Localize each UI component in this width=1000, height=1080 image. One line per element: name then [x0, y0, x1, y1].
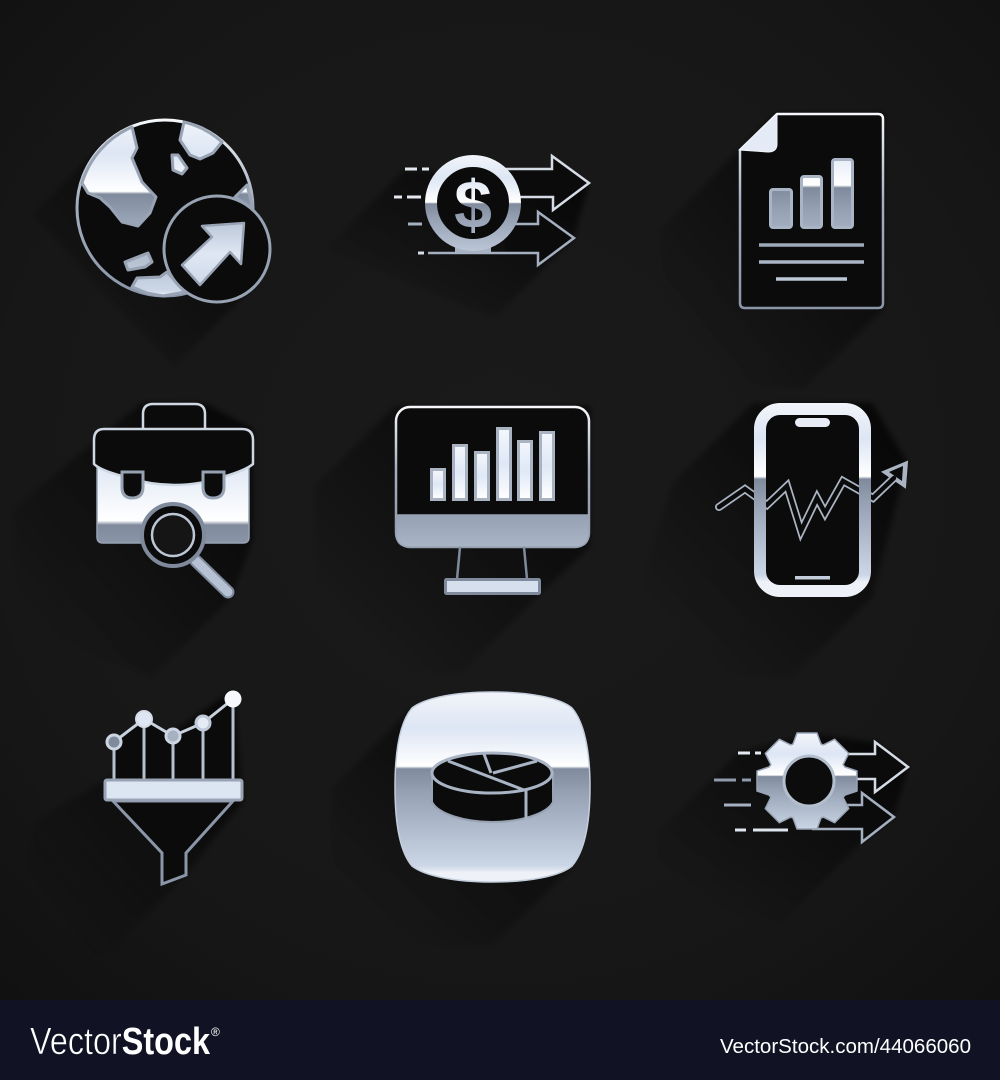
icon: globe with arrow: [32, 120, 270, 366]
handle: [143, 404, 205, 430]
case flap: [94, 429, 253, 485]
logo: VectorStock: [30, 1021, 211, 1063]
icon: squircle with pie chart: [332, 692, 590, 946]
stock line: [719, 462, 907, 531]
arrows: [428, 156, 589, 265]
phone frame: [760, 409, 865, 591]
funnel rim: [105, 780, 242, 800]
folded corner: [739, 114, 777, 152]
arrow badge: [164, 196, 270, 302]
icon: report document with bars: [659, 113, 884, 388]
icon: briefcase with magnifier: [13, 403, 253, 677]
buckles: [122, 472, 143, 498]
chart stems and line: [114, 699, 233, 779]
3D pie chart: [432, 753, 553, 822]
arrows: [812, 742, 908, 842]
magnifier: [196, 561, 228, 592]
image id: VectorStock.com/44066060: [720, 1036, 971, 1058]
continents: [82, 122, 253, 296]
speed dashes: [394, 169, 429, 253]
coin: [455, 245, 491, 254]
bars: [770, 160, 852, 228]
icon: dollar coin with arrows: $: [454, 167, 492, 243]
data points: [107, 735, 121, 749]
registered mark: ®: [211, 1025, 220, 1039]
funnel: [113, 801, 233, 884]
gear: [757, 733, 857, 829]
home bar: [795, 576, 830, 580]
icon: dollar coin with arrows: [325, 156, 589, 318]
footer bar: [0, 1000, 1000, 1080]
icon: gear with arrows: [655, 733, 908, 922]
notch: [795, 418, 830, 427]
case body: [97, 465, 249, 543]
text lines: [759, 245, 864, 279]
icon: smartphone with stock line: [640, 403, 907, 677]
monitor chin: [396, 515, 589, 547]
speed dashes: [714, 753, 788, 830]
icon: funnel with line chart: [24, 690, 243, 964]
bar chart: [432, 428, 554, 500]
monitor stand: [457, 547, 527, 579]
icon: monitor with bar chart: [315, 406, 590, 674]
